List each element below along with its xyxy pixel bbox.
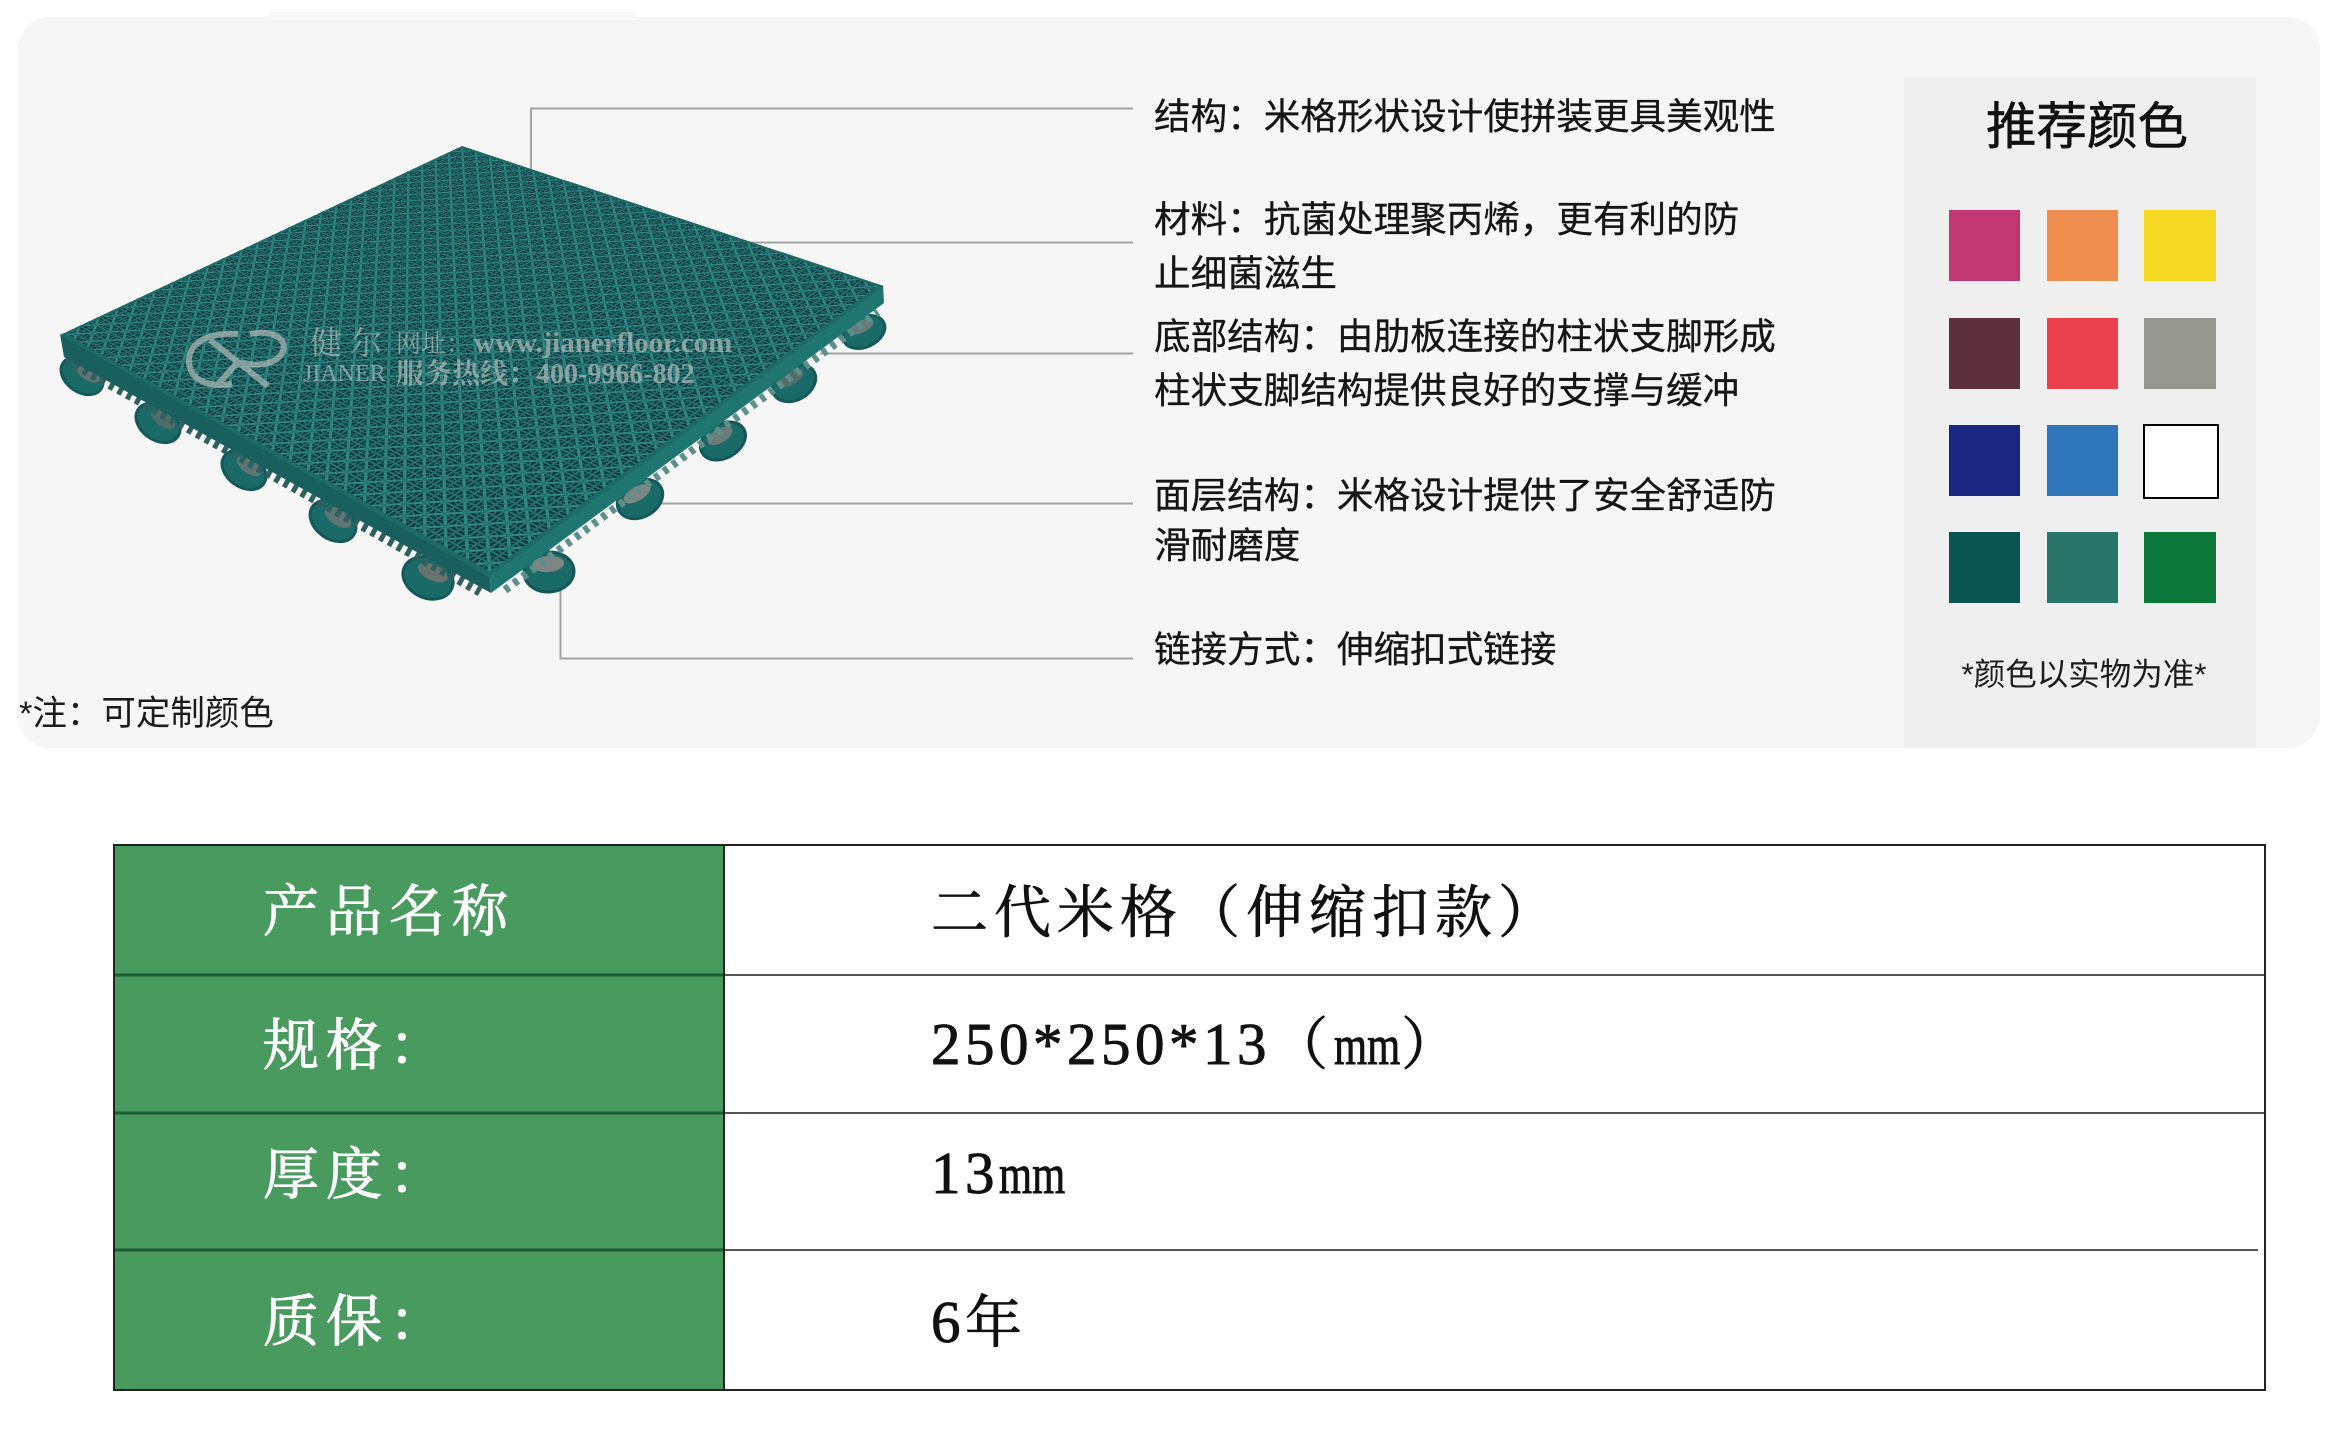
- heading: recommended colours: 推荐颜色: [1986, 98, 2188, 155]
- text block: bottom structure: [1154, 316, 1776, 411]
- table value: thickness: [931, 1140, 1065, 1206]
- table label: product name: 产品名称: [263, 882, 515, 944]
- text block: surface structure: 面层结构：米格设计提供了安全舒适防: [1154, 475, 1776, 516]
- watermark: logo and site text: [186, 325, 732, 390]
- text block: bottom structure: 底部结构：由肋板连接的柱状支脚形成: [1154, 316, 1776, 357]
- swatch: orange: [2047, 210, 2118, 281]
- label column background: [115, 846, 725, 1389]
- text block: surface structure: [1154, 475, 1776, 566]
- note: custom colours: *注：可定制颜色: [19, 695, 274, 733]
- swatch: maroon: [1949, 318, 2020, 389]
- table value: size: 250*250*13（ ）: [931, 1011, 1464, 1077]
- product image: green floor tile: [60, 146, 886, 601]
- row dividers: [115, 974, 2264, 1252]
- swatch: red: [2047, 318, 2118, 389]
- table value: size: mm: [1334, 1015, 1400, 1077]
- caption: colour disclaimer: *颜色以实物为准*: [1961, 656, 2207, 692]
- swatch: green: [2144, 532, 2216, 603]
- swatch: yellow: [2144, 210, 2216, 281]
- tile top surface with star lattice: [60, 146, 884, 577]
- swatch: magenta: [1949, 210, 2020, 281]
- watermark: logo and site text: 健尔: [310, 325, 390, 361]
- table label: size: 规格：: [263, 1016, 452, 1078]
- text block: structure: 结构：米格形状设计使拼装更具美观性: [1154, 96, 1776, 137]
- swatch: teal: [2047, 532, 2118, 603]
- text block: material: 材料：抗菌处理聚丙烯，更有利的防: [1154, 199, 1739, 240]
- table value: thickness: 13: [931, 1140, 999, 1206]
- table value: thickness: mm: [999, 1144, 1065, 1206]
- swatch: blue: [2047, 425, 2118, 496]
- table: product specifications: [113, 844, 2266, 1391]
- table value: product name: 二代米格（伸缩扣款）: [931, 882, 1561, 945]
- text block: material: 止细菌滋生: [1154, 253, 1337, 294]
- text block: bottom structure: 柱状支脚结构提供良好的支撑与缓冲: [1154, 370, 1739, 411]
- watermark: logo and site text: www.jianerfloor.com: [474, 327, 732, 359]
- watermark: logo and site text: 服务热线：400-9966-802: [396, 358, 695, 390]
- panel: recommended colours: [1904, 78, 2256, 748]
- watermark: logo and site text: 网址：: [396, 330, 471, 358]
- leader lines: [530, 108, 1133, 660]
- text block: surface structure: 滑耐磨度: [1154, 525, 1300, 566]
- text block: material: [1154, 199, 1739, 294]
- table label: thickness: 厚度：: [263, 1145, 452, 1207]
- table value: warranty: 6年: [931, 1289, 1028, 1355]
- panel top edge bump: [268, 12, 635, 20]
- panel: product structure: [18, 17, 2320, 748]
- swatch: navy: [1949, 425, 2020, 496]
- table label: warranty: 质保：: [263, 1292, 452, 1354]
- swatch: grey: [2144, 318, 2216, 389]
- swatch: dark teal: [1949, 532, 2020, 603]
- swatch: white: [2143, 424, 2219, 499]
- watermark: logo and site text: JIANER: [303, 361, 386, 387]
- tile side faces and connector clips: [60, 285, 886, 601]
- text block: connection method: 链接方式：伸缩扣式链接: [1154, 629, 1556, 670]
